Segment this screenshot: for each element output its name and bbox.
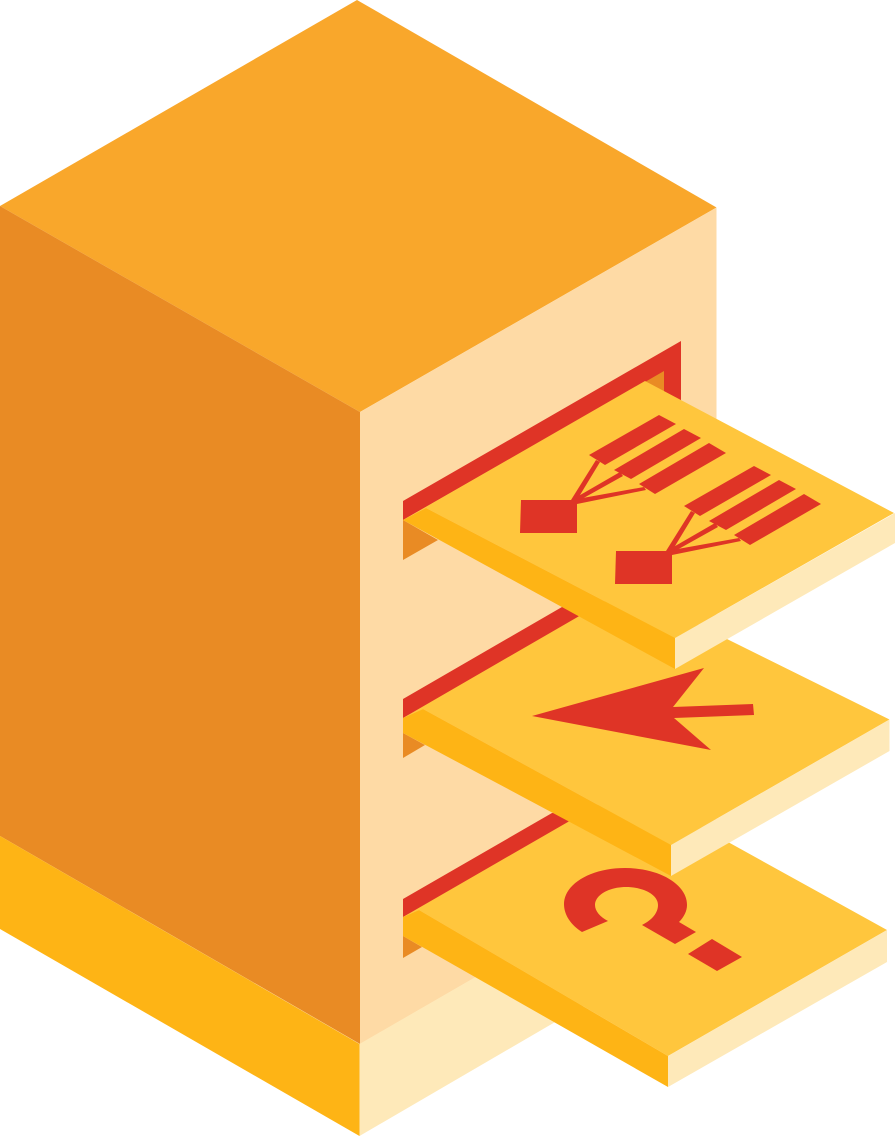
icon: network diagram 1 bbox=[520, 415, 726, 533]
drawer 3 right side bbox=[668, 930, 887, 1087]
drawer 1 top face bbox=[403, 381, 894, 638]
drawer 1 slot shadow bbox=[403, 520, 438, 560]
drawer 1 right side bbox=[675, 513, 895, 669]
cabinet left face bbox=[0, 206, 360, 1044]
cabinet right face bbox=[360, 208, 716, 1044]
drawer 1: network diagrams bbox=[403, 341, 895, 669]
drawer 1 slot interior bbox=[645, 371, 664, 393]
drawer 3 top face bbox=[403, 787, 887, 1056]
drawer 1 front side bbox=[403, 508, 675, 669]
icon: network diagram 2 bbox=[615, 466, 821, 584]
drawer 3 slot back edge bbox=[403, 813, 600, 917]
icon: arrow bbox=[532, 668, 754, 750]
drawer 1 slot frame bbox=[403, 341, 681, 520]
icon: question mark bbox=[564, 868, 742, 971]
drawer 2 top face bbox=[403, 589, 890, 845]
cabinet left plinth bbox=[0, 836, 360, 1136]
drawer 2: arrow bbox=[403, 589, 890, 876]
drawer 3 front side bbox=[403, 910, 668, 1087]
drawer 2 slot back edge bbox=[403, 607, 610, 718]
drawer 2 right side bbox=[671, 720, 890, 876]
drawer 3 slot shadow bbox=[403, 936, 422, 958]
cabinet right plinth bbox=[360, 838, 716, 1136]
cabinet top face bbox=[0, 0, 716, 412]
drawer 2 slot shadow bbox=[403, 733, 425, 758]
drawer 2 front side bbox=[403, 709, 671, 876]
drawer 3: question mark bbox=[403, 787, 887, 1087]
